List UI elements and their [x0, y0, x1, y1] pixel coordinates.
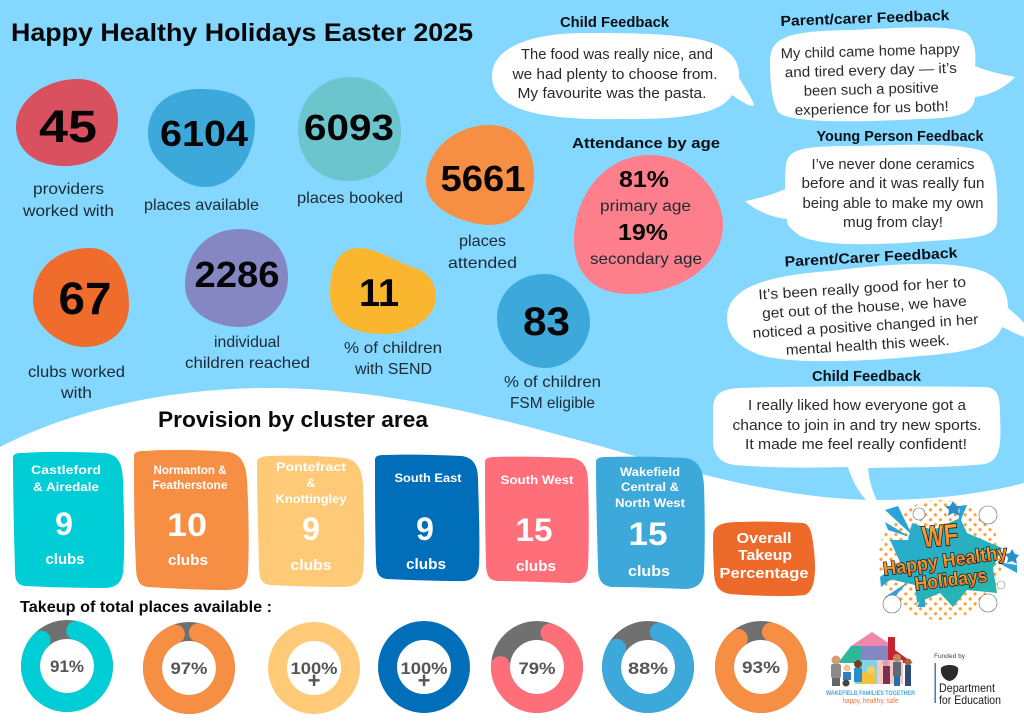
stat: places attended: 5661 [440, 158, 526, 199]
label: overall takeup percentage: Percentage [720, 565, 808, 582]
donut: 97% [144, 623, 234, 713]
stat: percent of children with SEND: % of children [344, 340, 442, 357]
cluster card: Wakefield Central & North West: Wakefield [620, 467, 680, 479]
stat: providers worked with: 45 [39, 101, 97, 152]
stat: percent of children FSM eligible: 83 [523, 300, 570, 344]
donut: 97%: 97% [170, 659, 208, 678]
stat: clubs worked with: clubs worked [28, 364, 125, 381]
feedback: parent/carer, home happy: Parent/carer Feedback [780, 8, 951, 30]
stat: percent of children with SEND [330, 248, 442, 378]
stat: individual children reached: 2286 [194, 254, 280, 295]
donut: 100%+ [388, 630, 460, 704]
donut: 88% [602, 621, 694, 713]
donut: 100%+: + [308, 668, 320, 693]
donut: 88%: 88% [628, 659, 668, 678]
attendance by age blob [574, 155, 723, 294]
cluster card: Pontefract & Knottingley: clubs [290, 557, 332, 574]
feedback: young person [745, 129, 997, 244]
logo: WF Happy Healthy Holidays comic burst [878, 500, 1019, 620]
stat: places attended: places [459, 233, 506, 250]
feedback: young person: being able to make my own [802, 196, 984, 212]
stat: places booked [297, 77, 403, 207]
cluster card: South West: 15 [516, 512, 552, 548]
heading: provision by cluster area: Provision by cluster area [158, 407, 429, 432]
cluster card: Normanton & Featherstone: clubs [168, 552, 208, 569]
attendance by age blob: 81% [619, 166, 669, 192]
feedback: child, food [492, 15, 754, 119]
stat: providers worked with: worked with [22, 203, 114, 220]
cluster card: South East [375, 455, 479, 581]
cluster card: Pontefract & Knottingley [257, 456, 364, 587]
feedback: child, sports [713, 369, 1000, 502]
stat: individual children reached: individual [214, 334, 280, 351]
feedback: young person: Young Person Feedback [816, 129, 984, 145]
cluster card: Wakefield Central & North West: 15 [628, 516, 668, 552]
feedback: young person: mug from clay! [843, 215, 943, 231]
title: Happy Healthy Holidays Easter 2025 [11, 19, 473, 47]
cluster card: South East: 9 [416, 511, 434, 547]
stat: percent of children with SEND: with SEND [354, 361, 432, 378]
stat: percent of children FSM eligible: % of children [504, 374, 601, 391]
attendance by age blob: primary age [600, 198, 691, 215]
logo: funded by Department for Education: Funded by [934, 653, 966, 660]
feedback: child, sports: It made me feel really confident! [745, 437, 967, 453]
donut: 79% [490, 620, 584, 714]
stat: places booked: places booked [297, 190, 403, 207]
donut: 100%+: + [418, 668, 430, 693]
feedback: parent/carer, mental health: It’s been really good for her to [758, 275, 967, 303]
feedback: parent/carer, mental health: Parent/Carer Feedback [784, 245, 959, 271]
stat: percent of children FSM eligible [497, 274, 601, 412]
cluster card: Pontefract & Knottingley: Pontefract [276, 460, 346, 474]
donut: 100%+ [278, 632, 350, 704]
stat: clubs worked with: with [60, 385, 92, 402]
logo: WF Happy Healthy Holidays comic burst: WF [921, 518, 960, 555]
cluster card: Wakefield Central & North West: Central & [621, 482, 679, 494]
cluster card: Castleford & Airedale [13, 452, 124, 588]
feedback: child, sports: chance to join in and try new sports. [732, 418, 982, 434]
feedback: parent/carer, home happy [770, 8, 1015, 121]
stat: clubs worked with: 67 [58, 273, 112, 324]
stat: places available: 6104 [160, 113, 248, 154]
feedback: parent/carer, home happy: and tired every day — it’s [785, 61, 957, 81]
stat: individual children reached [185, 229, 310, 372]
label: overall takeup percentage: Takeup [738, 547, 792, 564]
cluster card: South West: South West [500, 473, 574, 487]
feedback: young person: before and it was really fun [802, 176, 984, 192]
stat: percent of children with SEND: 11 [359, 272, 399, 315]
stat: places booked: 6093 [304, 107, 394, 148]
logo: WF Happy Healthy Holidays comic burst: Holidays [914, 566, 989, 595]
feedback: child, sports: I really liked how everyone got a [748, 398, 967, 414]
heading: takeup of total places available: Takeup of total places available : [20, 599, 272, 616]
logo: Wakefield Families Together: WAKEFIELD FAMILIES TOGETHER [826, 690, 915, 697]
stat: places attended [426, 125, 534, 272]
feedback: child, food: My favourite was the pasta. [518, 86, 706, 102]
logo: funded by Department for Education [934, 653, 1001, 707]
stat: places attended: attended [448, 255, 517, 272]
attendance by age blob: secondary age [590, 251, 702, 268]
cluster card: Wakefield Central & North West: North West [615, 498, 685, 510]
cluster card: South East: clubs [406, 556, 446, 573]
feedback: parent/carer, home happy: been such a positive [804, 80, 939, 100]
cluster card: Normanton & Featherstone: Featherstone [152, 480, 228, 492]
stat: individual children reached: children reached [185, 355, 310, 372]
cluster card: Castleford & Airedale: clubs [46, 551, 84, 568]
donut: 79%: 79% [518, 659, 556, 678]
feedback: parent/carer, mental health [727, 245, 1024, 361]
stat: places available: places available [144, 197, 259, 214]
donut: 100%+: 100% [290, 659, 338, 678]
feedback: parent/carer, mental health: get out of the house, we have [762, 294, 967, 322]
donut: 91% [23, 622, 111, 710]
feedback: parent/carer, home happy: My child came home happy [781, 42, 961, 62]
cluster card: Normanton & Featherstone [134, 450, 249, 590]
feedback: child, food: we had plenty to choose from. [511, 67, 718, 83]
cluster card: Pontefract & Knottingley: 9 [302, 511, 320, 547]
label: overall takeup percentage: Overall [736, 530, 792, 547]
cluster card: Pontefract & Knottingley: Knottingley [276, 492, 347, 506]
logo: WF Happy Healthy Holidays comic burst: Happy Healthy [882, 542, 1009, 581]
donut: 100%+: 100% [400, 659, 448, 678]
feedback: child, food: Child Feedback [560, 15, 670, 31]
donut: 93% [716, 622, 806, 712]
stat: providers worked with: providers [33, 181, 104, 198]
heading: attendance by age: Attendance by age [572, 135, 720, 152]
donut: 93%: 93% [742, 658, 780, 677]
attendance by age blob: 19% [618, 219, 668, 245]
cluster card: Pontefract & Knottingley: & [307, 476, 316, 490]
cluster card: Castleford & Airedale: Castleford [31, 463, 101, 477]
cluster card: South East: South East [394, 471, 462, 485]
feedback: young person: I’ve never done ceramics [812, 157, 974, 173]
feedback: child, sports: Child Feedback [812, 369, 922, 385]
label: overall takeup percentage [713, 522, 815, 596]
cluster card: Castleford & Airedale: & Airedale [33, 480, 99, 494]
logo: funded by Department for Education: for Education [939, 693, 1001, 707]
logo: Wakefield Families Together: happy, healthy, safe [842, 698, 899, 705]
stat: providers worked with [16, 79, 118, 220]
cluster card: South West [485, 457, 589, 583]
cluster card: South West: clubs [516, 558, 556, 575]
cluster card: Normanton & Featherstone: 10 [167, 507, 207, 543]
stat: clubs worked with [28, 248, 129, 402]
feedback: child, food: The food was really nice, and [521, 47, 713, 63]
cluster card: Normanton & Featherstone: Normanton & [154, 465, 226, 477]
logo: funded by Department for Education: Department [939, 681, 996, 695]
stat: percent of children FSM eligible: FSM eligible [510, 395, 595, 412]
donut: 91%: 91% [50, 657, 84, 676]
feedback: parent/carer, mental health: mental health this week. [785, 333, 950, 359]
cluster card: Castleford & Airedale: 9 [55, 506, 73, 542]
stat: places available [144, 89, 259, 214]
cluster card: Wakefield Central & North West [596, 457, 705, 589]
logo: Wakefield Families Together [826, 632, 915, 705]
cluster card: Wakefield Central & North West: clubs [628, 563, 670, 580]
feedback: parent/carer, mental health: noticed a positive changed in her [752, 312, 979, 342]
feedback: parent/carer, home happy: experience for us both! [795, 99, 949, 119]
